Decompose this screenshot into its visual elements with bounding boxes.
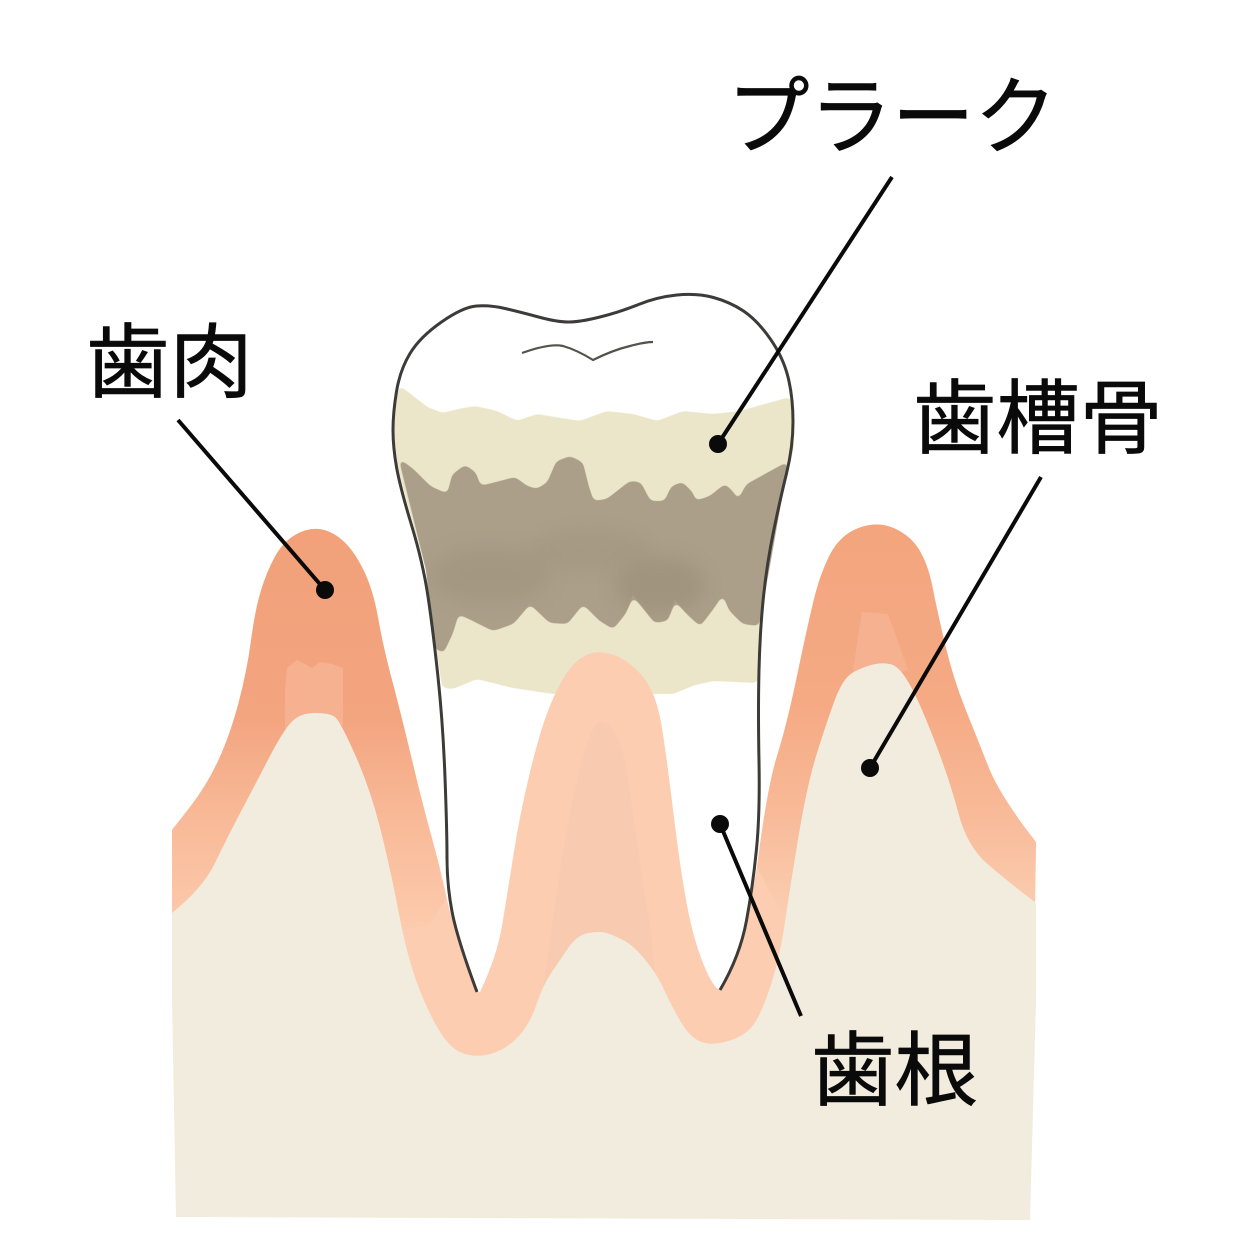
label: gum: 歯肉 (86, 319, 253, 409)
tooth white body (393, 294, 793, 992)
plaque: light band (393, 387, 793, 693)
label: alveolar bone: 歯槽骨 (913, 375, 1163, 465)
gum: left lighter notch (285, 660, 343, 735)
label: gum (86, 319, 334, 599)
gum: base layer with middle peak (172, 524, 1036, 1100)
alveolar bone (172, 663, 1036, 1220)
label: root (711, 815, 978, 1117)
label: alveolar bone (861, 375, 1163, 777)
plaque: dark band (400, 457, 787, 652)
label: root: 歯根 (811, 1027, 978, 1117)
gum: interdental inner layer (543, 722, 657, 990)
gum: right darker layer (757, 524, 1036, 922)
gum: left darker layer (172, 529, 446, 930)
tooth groove (522, 342, 653, 360)
tooth outline (393, 294, 793, 992)
gum: right lighter notch (850, 612, 908, 690)
gum (172, 524, 1036, 1100)
tooth (392, 340, 794, 694)
label: plaque: プラーク (727, 71, 1057, 166)
label: plaque (709, 71, 1057, 453)
